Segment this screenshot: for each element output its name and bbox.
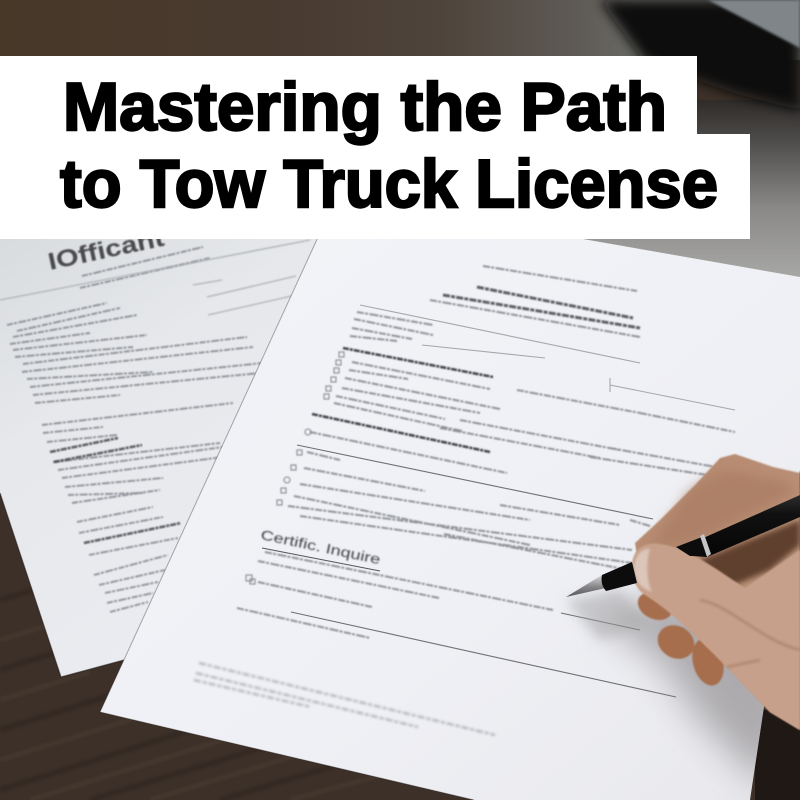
hand holding pen [566, 454, 800, 730]
signature rules [262, 305, 735, 697]
pen metal tip [566, 575, 606, 597]
back document sheet [0, 225, 330, 677]
front sheet title [443, 287, 640, 328]
pen barrel [683, 495, 800, 557]
title banner [0, 56, 750, 239]
back sheet heading: IOfficant [46, 225, 167, 276]
section heading: certificate inquire: Certific. Inquire [259, 526, 382, 567]
back of hand [635, 454, 800, 730]
thumb highlight [634, 549, 652, 592]
front sheet section headings [312, 348, 493, 452]
knuckle shading [650, 470, 800, 548]
front document sheet [100, 235, 800, 800]
palm shadow behind pen [700, 520, 800, 585]
back sheet form rules [0, 240, 310, 315]
pen and hand shadow on paper [566, 584, 764, 792]
laptop corner, top right [600, 0, 800, 110]
title text: to Tow Truck License [60, 146, 718, 222]
pen grip [602, 562, 637, 591]
wood grain [0, 582, 400, 800]
pen [566, 495, 800, 597]
front sheet footer text [194, 663, 495, 735]
pen ring [700, 534, 711, 557]
front sheet body lines [237, 266, 760, 638]
thumb [632, 544, 800, 730]
pen collar [676, 537, 708, 556]
checkboxes [246, 352, 344, 584]
back sheet bold headings [50, 438, 181, 543]
knuckle lines [700, 600, 800, 667]
lower fingers [633, 587, 729, 689]
back sheet text lines [7, 247, 263, 612]
title text: Mastering the Path [63, 69, 667, 145]
